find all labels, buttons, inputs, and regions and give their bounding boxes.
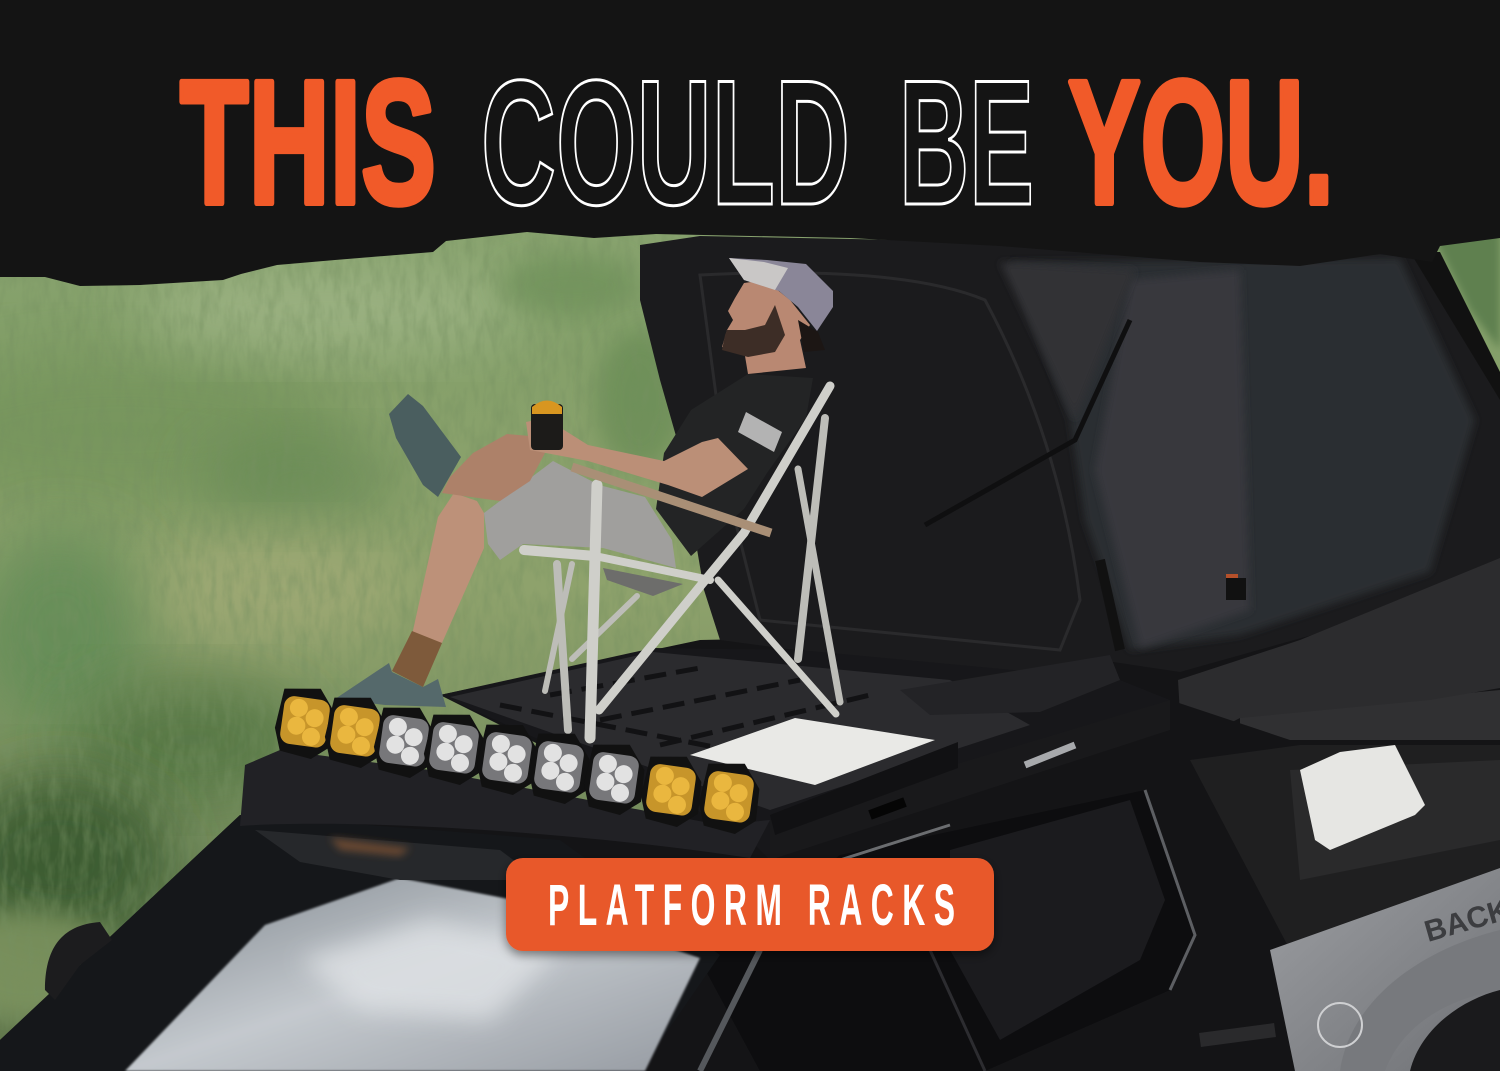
light 4 white (420, 709, 489, 788)
folded awning (1178, 558, 1500, 750)
platform rack (440, 648, 1170, 860)
raised shoe (389, 394, 461, 497)
title (180, 43, 1334, 242)
neck and head (722, 280, 810, 374)
light bar (271, 683, 764, 837)
torn black header (0, 0, 1500, 286)
sock (392, 631, 442, 687)
title: THIS (180, 45, 436, 241)
dark backing behind tent and rack (440, 600, 1500, 860)
white panel on rack (690, 718, 958, 835)
button: platform racks (506, 858, 994, 951)
shorts (484, 461, 676, 568)
upper crossing leg (442, 434, 545, 501)
chair rear frame (545, 418, 840, 730)
shirt (656, 374, 813, 556)
flag patch (738, 412, 782, 452)
light 5 white (473, 719, 542, 798)
jerry can (1300, 745, 1425, 850)
lower leg (412, 493, 484, 643)
chair front frame (524, 386, 836, 738)
foot on rack (335, 663, 446, 707)
button: platform racks: PLATFORM RACKS (548, 873, 955, 937)
light 2 amber (321, 692, 390, 771)
light 1 amber (271, 683, 340, 762)
can (531, 400, 563, 450)
light 3 white (370, 702, 439, 781)
title: BE (899, 43, 1034, 242)
windshield (0, 815, 720, 1071)
truck body (0, 700, 1500, 1071)
man in chair (335, 258, 840, 738)
light 9 amber (695, 758, 764, 837)
arm (526, 418, 748, 497)
beard (722, 305, 785, 357)
cap (729, 258, 833, 331)
rooftop tent (640, 236, 1500, 672)
light 7 white (580, 739, 649, 818)
light 8 amber (637, 751, 706, 830)
door window (700, 790, 1195, 1071)
light 6 white (525, 728, 594, 807)
wind fairing (240, 750, 770, 858)
title: COULD (481, 43, 850, 242)
chair seat (603, 568, 683, 596)
side mirror (45, 922, 112, 1000)
hair (798, 320, 825, 352)
wooden arm rest (572, 467, 771, 533)
title: YOU. (1068, 45, 1334, 241)
